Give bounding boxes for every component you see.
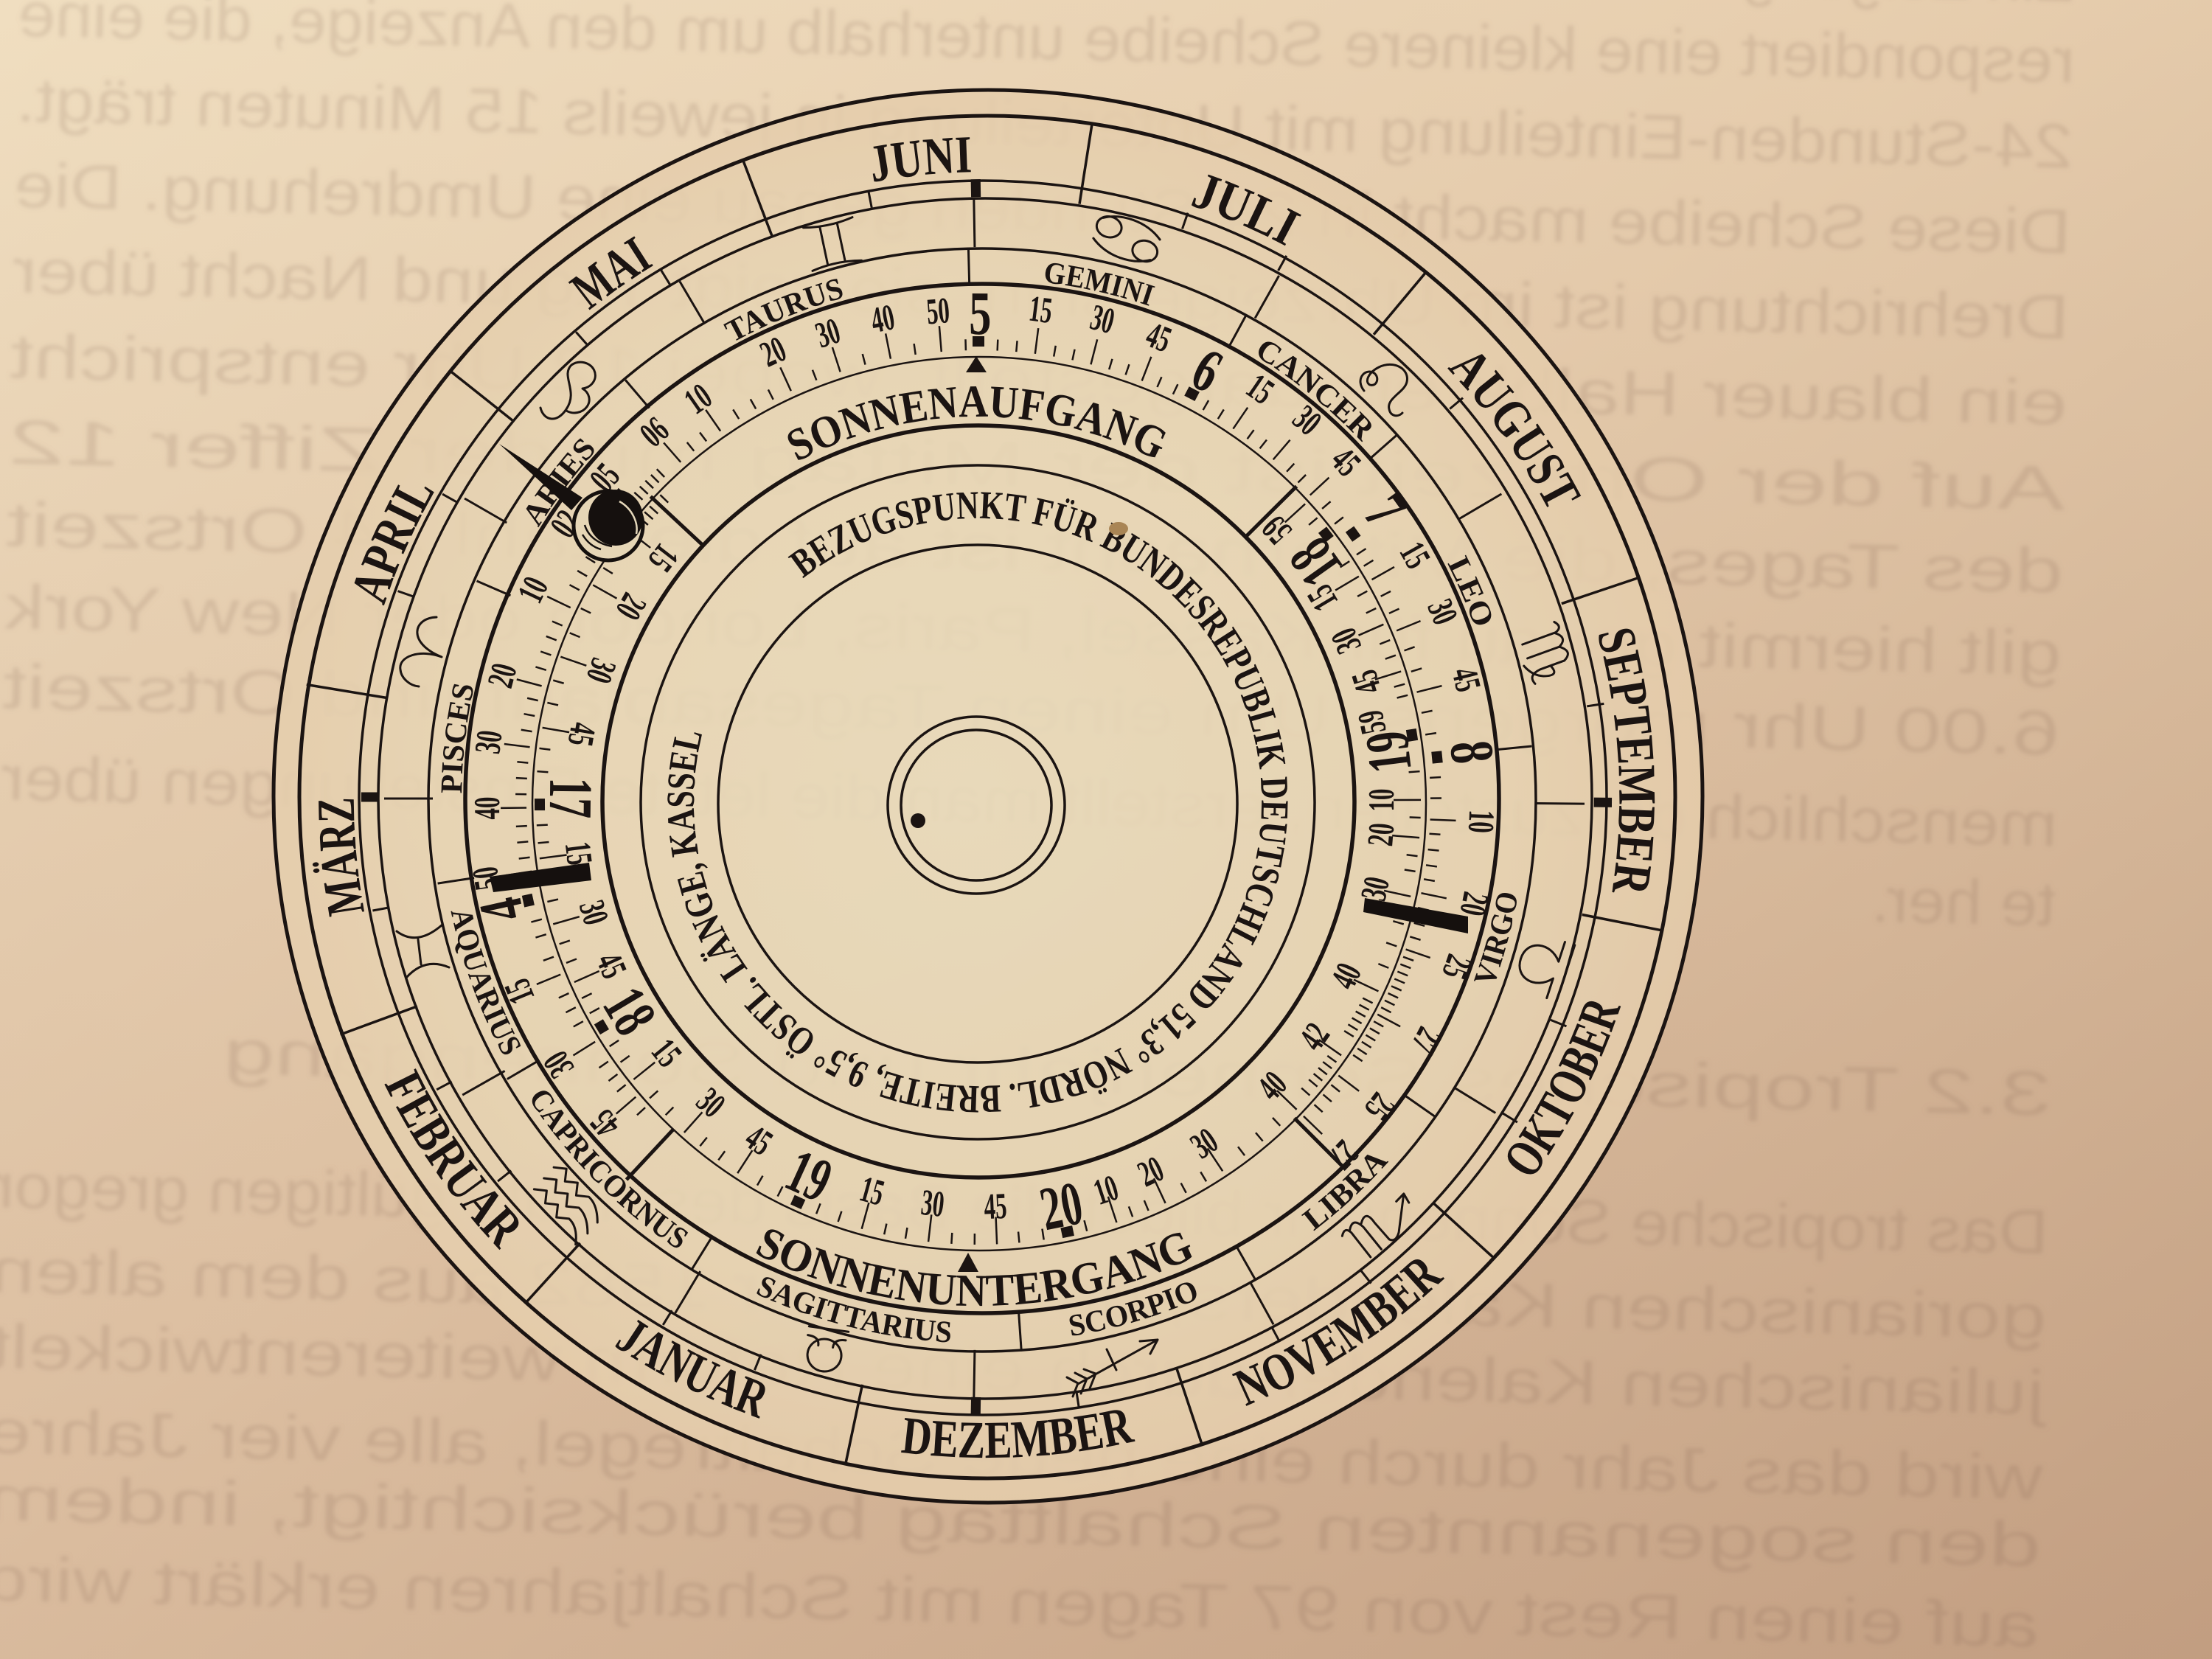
sunrise scale numerals (outer): 30 <box>467 728 509 756</box>
sunrise scale numerals (outer): 20 <box>754 328 792 375</box>
show-through mirrored text from the reverse page: 6.00 Uhr morgens. Um einen Tagesablauf und Ortszeit <box>2 652 2060 769</box>
sunset scale numerals (inner): 17 <box>536 777 604 818</box>
sunset scale numerals (inner): 30 <box>571 896 617 929</box>
inner major ticks <box>540 504 1421 1244</box>
zodiac name ring dividers <box>438 248 1531 1350</box>
sunrise scale numerals (outer): 06 <box>632 409 676 455</box>
show-through mirrored text from the reverse page: gilt hiermit genau für Kassel, Paris, London oder New York <box>4 572 2062 689</box>
sunset scale numerals (inner): 42 <box>1291 1015 1338 1057</box>
pointer hand with hub <box>499 444 643 560</box>
sign: SAGITTARIUS: SAGITTARIUS <box>751 1237 964 1385</box>
sunrise scale numerals (outer): 50 <box>464 864 508 893</box>
sunset scale numerals (inner): 19 <box>1353 728 1425 776</box>
sunset scale numerals (inner): 20 <box>1034 1169 1088 1244</box>
icon: Leo <box>1360 364 1407 416</box>
show-through mirrored text from the reverse page: 24-Stunden-Einteilung mit Unterteilung in jeweils 15 Minuten trägt. <box>15 65 2073 182</box>
icon: Libra <box>1512 931 1575 1001</box>
sunrise and sunset scale <box>464 262 1507 1443</box>
show-through mirrored text from the reverse page: wird das Jahr durch eine neue Schaltregel, alle vier Jahre <box>0 1397 2045 1513</box>
sunset scale numerals (inner): 15 <box>856 1168 888 1214</box>
heading: SONNENUNTERGANG: SONNENUNTERGANG <box>748 1056 1214 1443</box>
sunset scale numerals (inner): 45 <box>588 947 635 984</box>
black date bar: right <box>1363 898 1468 933</box>
sign: LEO: LEO <box>1436 551 1505 635</box>
sunset scale numerals (inner): 10 <box>1360 789 1402 812</box>
inner minor ticks <box>537 495 1421 1245</box>
sunset scale numerals (inner): 18 <box>1276 526 1356 599</box>
stain spot <box>1109 522 1128 535</box>
show-through mirrored text from the reverse page: 3.2 Tropisches Sonnenjahr und Sonnengang <box>223 1018 2052 1129</box>
show-through mirrored text from the reverse page: den sogenannten Schalttag berücksichtigt, indem <box>0 1464 2042 1580</box>
sunrise scale numerals (outer): 7 <box>1352 481 1420 540</box>
show-through mirrored text from the reverse page: auf einen Rest von 97 Tagen mit Schaltjahren erklärt wird <box>0 1544 2040 1659</box>
show-through mirrored text from the reverse page: menschlich darzustellen, erstellt man die letzte Einstellungen über <box>0 743 2059 860</box>
sunset scale numerals (inner): 59 <box>1253 508 1299 552</box>
sunrise scale numerals (outer): 30 <box>1285 397 1329 443</box>
sunrise scale numerals (outer): 30 <box>1419 594 1466 630</box>
show-through mirrored text from the reverse page: Diese Scheibe macht in 24 Stunden genau eine Umdrehung. Die <box>13 150 2072 268</box>
month: OKTOBER: OKTOBER <box>1507 1001 1621 1174</box>
sunrise scale numerals (outer): 45 <box>582 1102 627 1146</box>
sunrise scale numerals (outer): 50 <box>925 290 951 332</box>
zodiac names <box>435 256 1534 1385</box>
sunrise scale numerals (outer): 8 <box>1437 737 1507 767</box>
month: JUNI: JUNI <box>873 137 971 181</box>
month: SEPTEMBER: SEPTEMBER <box>1599 628 1655 892</box>
sunset scale numerals (inner): 30 <box>919 1181 947 1225</box>
sunrise scale numerals (outer): 15 <box>1239 366 1281 412</box>
sign: AQUARIUS: AQUARIUS <box>443 901 529 1065</box>
sign: VIRGO: VIRGO <box>1460 884 1534 991</box>
icon: Gemini <box>804 218 861 271</box>
icon: Sagittarius arrow <box>1067 1340 1158 1397</box>
icon: Pisces <box>397 925 449 978</box>
sign: CAPRICORNUS: CAPRICORNUS <box>521 1060 701 1280</box>
sunset scale numerals (inner): 40 <box>1323 957 1369 995</box>
sunrise scale numerals (outer): 05 <box>582 455 627 499</box>
sunrise scale numerals (outer): 30 <box>810 310 845 355</box>
sign: LIBRA: LIBRA <box>1292 1140 1400 1237</box>
sunrise scale numerals (outer): 20 <box>1453 888 1497 919</box>
sign: TAURUS: TAURUS <box>720 259 854 361</box>
sunrise scale numerals (outer): 27 <box>1321 1133 1366 1178</box>
sunset scale numerals (inner): 15 <box>641 537 687 580</box>
centre dot <box>911 813 925 828</box>
show-through mirrored text from the reverse page: Drehrichtung ist im Uhrzeigersinn, sie zeigt Tag und Nacht über <box>12 236 2070 353</box>
sunset scale numerals (inner): 15 <box>644 1031 690 1074</box>
centre hub rings <box>888 717 1065 894</box>
month: AUGUST: AUGUST <box>1447 354 1581 507</box>
sunrise scale numerals (outer): 45 <box>1444 664 1489 695</box>
icon: Scorpio <box>1339 1194 1423 1264</box>
sunset scale numerals (inner): 20 <box>1360 821 1402 848</box>
zodiac symbol ring dividers <box>384 198 1585 1399</box>
sunrise scale numerals (outer): 10 <box>1461 810 1503 834</box>
month: DEZEMBER: DEZEMBER <box>901 1410 1135 1458</box>
sign: CANCER: CANCER <box>1240 332 1391 452</box>
sunset scale numerals (inner): 15 <box>557 840 601 867</box>
icon: Aquarius <box>525 1162 611 1245</box>
sunrise scale numerals (outer): 25 <box>1434 950 1481 984</box>
month labels <box>294 116 1716 1494</box>
sunrise scale numerals (outer): 10 <box>677 375 719 422</box>
black date bar: left <box>490 863 591 892</box>
sunrise scale numerals (outer): 25 <box>1357 1085 1403 1128</box>
sunset scale numerals (inner): 45 <box>1343 665 1389 699</box>
icon: Capricorn <box>803 1326 849 1374</box>
show-through mirrored text from the reverse page: julianischen Kalender durch eine Reform weiterentwickelt <box>0 1312 2048 1428</box>
month: MAI: MAI <box>568 236 653 310</box>
sunset scale numerals (inner): 45 <box>560 720 604 749</box>
sunrise scale numerals (outer): 30 <box>535 1044 582 1085</box>
show-through mirrored text from the reverse page: gorianischen Kalenders, der im Jahr 1582 aus dem alten <box>0 1236 2047 1352</box>
icon: Virgo <box>1513 621 1574 685</box>
sign: PISCES: PISCES <box>435 680 481 794</box>
sunrise scale numerals (outer): 5 <box>969 279 992 347</box>
sunrise scale numerals (outer): 15 <box>496 973 542 1010</box>
sunrise scale numerals (outer): 15 <box>1027 288 1054 331</box>
sunset scale numerals (inner) <box>536 508 1425 1244</box>
sunset scale numerals (inner): 30 <box>579 653 625 689</box>
show-through mirrored text from the reverse page: te her. <box>1871 866 2056 940</box>
reference point inscription: BEZUGSPUNKT FÜR BUNDESREPUBLIK DEUTSCHLAND 51,3° NÖRDL. BREITE, 9,5° ÖSTL. LÄNGE, KASSEL <box>529 354 1426 1251</box>
sunrise scale numerals (outer): 20 <box>479 659 524 692</box>
month: NOVEMBER: NOVEMBER <box>1231 1259 1445 1406</box>
sunset scale numerals (inner): 18 <box>590 976 669 1046</box>
sunrise scale numerals (outer): 10 <box>509 571 556 609</box>
show-through mirrored text from the reverse page: Auf der Ortszeit ist der Mittag mit der Ziffer 12 <box>7 407 2066 524</box>
month: FEBRUAR: FEBRUAR <box>384 1068 519 1251</box>
sunset scale numerals (inner): 30 <box>1323 622 1369 660</box>
sunset scale numerals (inner): 20 <box>608 587 655 627</box>
icon: Aries <box>400 617 442 686</box>
month: APRIL: APRIL <box>354 484 434 606</box>
outer major ticks <box>501 326 1456 1134</box>
sunrise scale numerals (outer) <box>464 279 1507 1178</box>
sunrise scale numerals (outer): 45 <box>1141 314 1177 360</box>
month: MÄRZ: MÄRZ <box>313 799 364 917</box>
sunrise scale numerals (outer): 40 <box>868 296 898 341</box>
sunrise scale numerals (outer): 6 <box>1181 335 1233 406</box>
month: JANUAR: JANUAR <box>615 1320 765 1419</box>
sign: GEMINI: GEMINI <box>1040 256 1159 314</box>
sunset scale numerals (inner): 19 <box>776 1137 841 1215</box>
sunset scale numerals (inner): 20 <box>1132 1148 1169 1194</box>
sunrise scale numerals (outer): 4 <box>465 891 538 928</box>
icon: Taurus <box>540 362 595 419</box>
sunrise scale numerals (outer): 45 <box>1324 439 1369 484</box>
sunset scale numerals (inner): 30 <box>1352 873 1397 904</box>
dial disc <box>274 90 1703 1503</box>
sunrise scale numerals (outer): 40 <box>466 796 507 820</box>
outer minor ticks <box>515 339 1441 1115</box>
show-through mirrored text from the reverse page: des Tages, die Mitternacht ist auf die Zahl 24 Ortszeit <box>6 490 2064 607</box>
sunset scale numerals (inner): 15 <box>1299 578 1346 619</box>
icon: Cancer <box>1091 212 1164 266</box>
show-through mirrored text from the reverse page: ein blauer Halbkreis dargestellt, wobei 12 Uhr entspricht <box>10 321 2068 439</box>
hour square markers <box>522 336 1443 1238</box>
sunrise scale numerals (outer): 15 <box>1392 535 1439 575</box>
month dividers and day markers <box>307 124 1663 1464</box>
sign: SCORPIO: SCORPIO <box>1063 1273 1206 1343</box>
sign: ARIES: ARIES <box>515 427 605 536</box>
show-through mirrored text from the reverse page: Das tropische Sonnenjahr bildet die Basis des heute gültigen gregor <box>0 1151 2049 1267</box>
sunset scale numerals (inner): 10 <box>1088 1166 1123 1213</box>
heading: SONNENAUFGANG: SONNENAUFGANG <box>778 262 1189 616</box>
sunset scale numerals (inner): 45 <box>738 1116 780 1164</box>
sunset scale numerals (inner): 59 <box>1349 707 1394 737</box>
concentric rings <box>274 90 1703 1503</box>
sunrise scale numerals (outer): 02 <box>542 503 588 544</box>
sunset scale numerals (inner): 40 <box>1249 1063 1295 1108</box>
month: JULI: JULI <box>1192 174 1301 246</box>
sunrise scale numerals (outer): 27 <box>1404 1021 1450 1060</box>
sunset scale numerals (inner): 45 <box>983 1185 1008 1227</box>
calendar dial <box>274 90 1716 1503</box>
zodiac symbols <box>397 212 1575 1397</box>
sunrise scale numerals (outer): 30 <box>1086 296 1119 341</box>
sunset scale numerals (inner): 30 <box>1183 1120 1225 1166</box>
sunset scale numerals (inner): 30 <box>689 1079 733 1125</box>
triangle markers <box>958 356 987 1272</box>
sector closing lines <box>627 487 1343 1180</box>
